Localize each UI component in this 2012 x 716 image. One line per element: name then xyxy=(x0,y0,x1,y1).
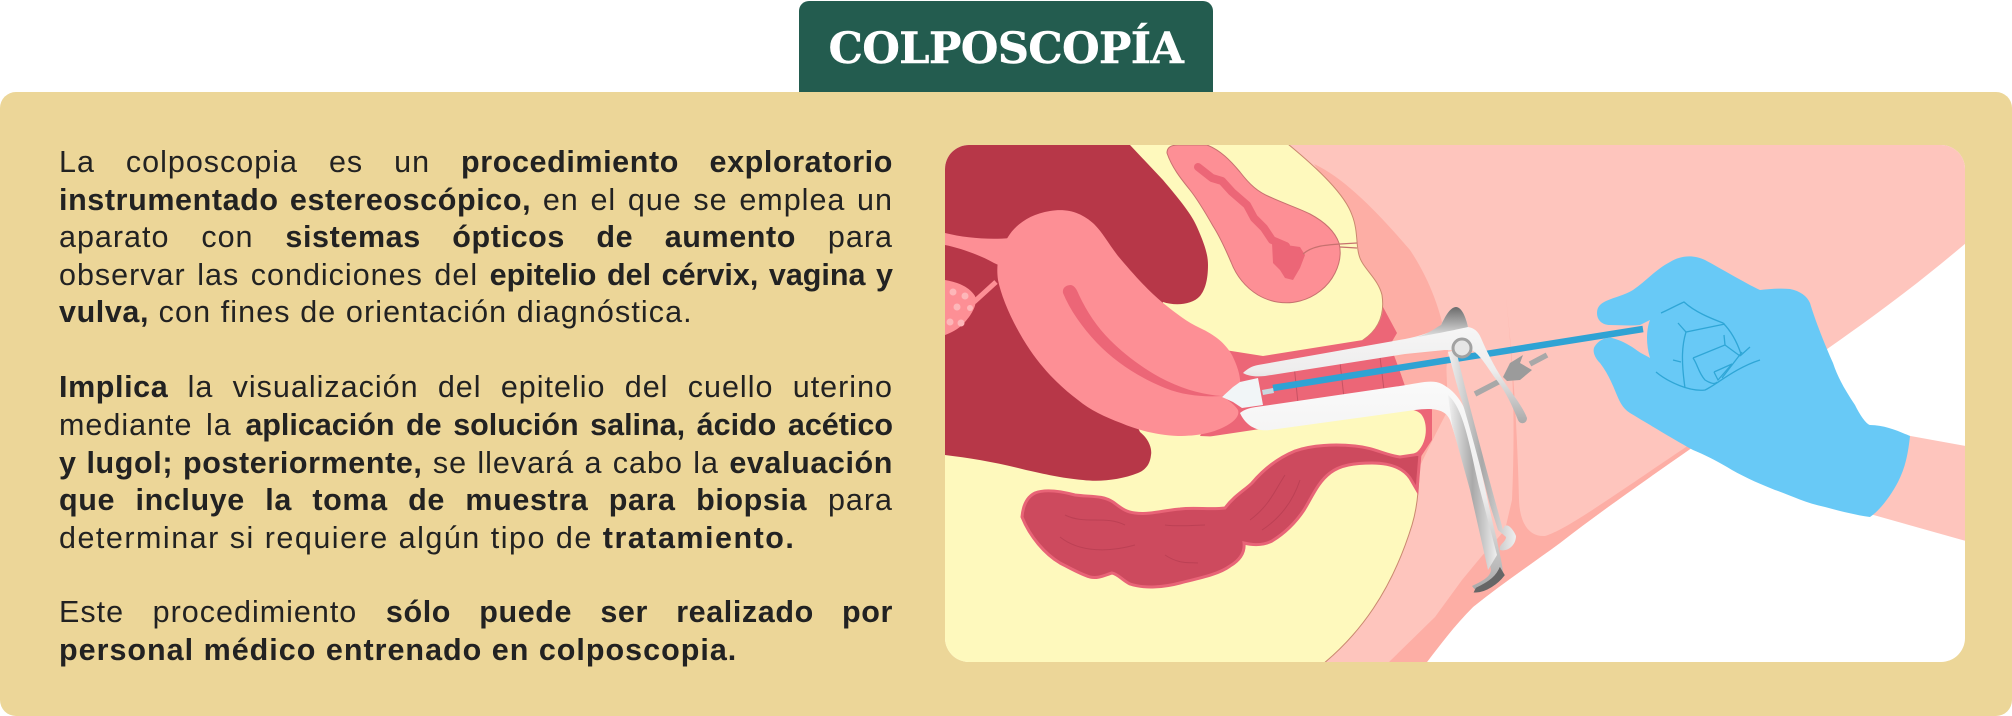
text block: definition: aparato con sistemas ópticos de aumento para xyxy=(59,220,893,254)
text block: implication: y lugol; posteriormente, se llevará a cabo la evaluación xyxy=(59,446,893,480)
glove creases xyxy=(1656,302,1760,390)
speculum handle shading xyxy=(1448,395,1497,570)
uterine cavity xyxy=(1063,285,1222,396)
text block: definition: instrumentado estereoscópico, en el que se emplea un xyxy=(59,183,893,217)
ovary xyxy=(945,280,996,335)
vaginal muscle wall xyxy=(1200,307,1432,458)
body: darker skin band around pelvis xyxy=(1314,164,1448,470)
yellow pelvic fat xyxy=(938,140,1426,668)
text block: implication xyxy=(59,370,893,555)
screw and wing nut xyxy=(1475,355,1547,394)
rectum xyxy=(1022,445,1420,587)
speculum upper blade xyxy=(1243,307,1527,423)
muscle: dark red intestine region xyxy=(945,145,1208,481)
urethra xyxy=(1303,243,1357,254)
speculum tip xyxy=(1476,570,1503,591)
text block: restriction: Este procedimiento sólo puede ser realizado por xyxy=(59,595,893,629)
hand in blue glove xyxy=(1594,256,1910,517)
yellow blob between vagina and rectum xyxy=(1210,410,1426,456)
speculum upper handle and hook xyxy=(1448,350,1516,550)
body: darker skin fold xyxy=(1389,332,1690,662)
cervix cap xyxy=(1222,378,1263,408)
text block: implication: determinar si requiere algún tipo de tratamiento. xyxy=(59,521,795,555)
text block: definition: vulva, con fines de orientación diagnóstica. xyxy=(59,295,693,329)
fallopian tube xyxy=(945,233,1008,264)
title: COLPOSCOPÍA xyxy=(829,24,1183,74)
blue applicator xyxy=(1273,329,1643,388)
uterus xyxy=(997,210,1240,436)
text block: definition: observar las condiciones del epitelio del cérvix, vagina y xyxy=(59,258,893,292)
rectal folds xyxy=(1060,475,1300,563)
text block: implication: que incluye la toma de muestra para biopsia para xyxy=(59,483,893,517)
text block: implication: mediante la aplicación de solución salina, ácido acético xyxy=(59,408,893,442)
text block: restriction: personal médico entrenado en colposcopia. xyxy=(59,633,737,667)
applicator stem xyxy=(1262,388,1274,395)
title tab xyxy=(799,1,1213,92)
speculum flare xyxy=(1418,307,1468,337)
illustration: colposcopy anatomical diagram xyxy=(945,145,1965,662)
speculum lower blade and handle xyxy=(1240,382,1503,591)
bladder xyxy=(1167,145,1340,303)
text block: definition: La colposcopia es un procedimiento exploratorio xyxy=(59,145,893,179)
vagina interior skin tone xyxy=(1395,350,1448,386)
vaginal rugae xyxy=(1294,357,1384,403)
text block: restriction xyxy=(59,595,893,667)
text block: implication: Implica la visualización del epitelio del cuello uterino xyxy=(59,370,893,404)
body: skin xyxy=(1280,145,1966,662)
text block: definition xyxy=(59,145,893,329)
image background xyxy=(945,145,1965,662)
forearm xyxy=(1870,435,1966,541)
speculum pivot ring xyxy=(1453,339,1471,357)
bladder lumen xyxy=(1198,167,1305,280)
